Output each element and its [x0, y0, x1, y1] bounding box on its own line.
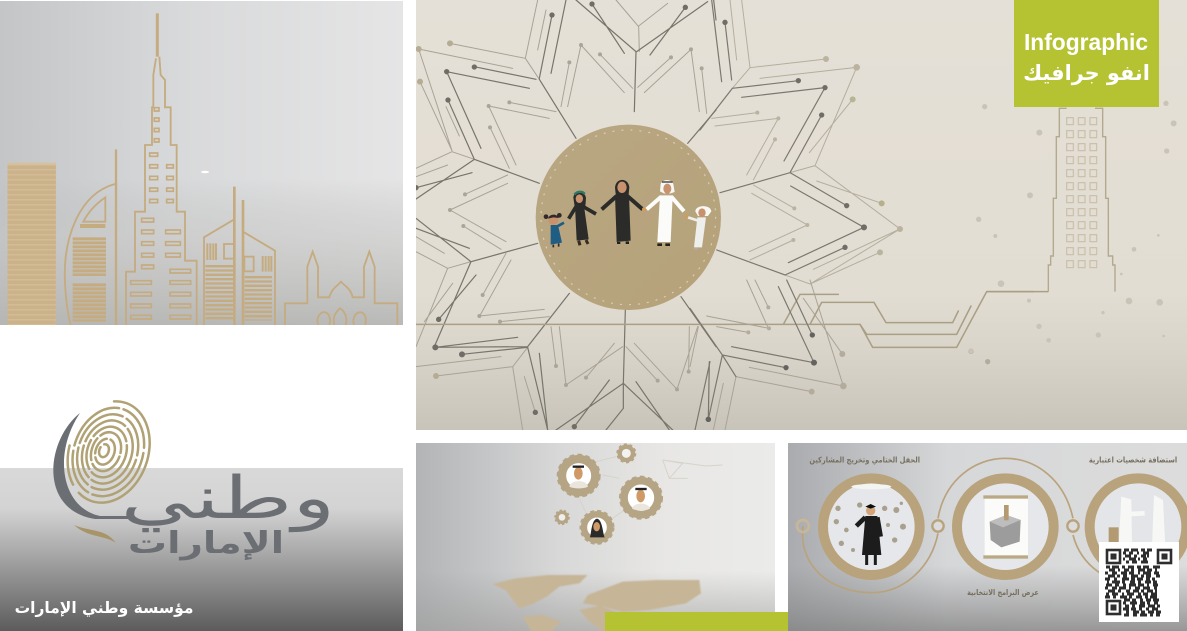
fingerprint	[54, 390, 163, 514]
step captions: الحفل الختامي وتخريج المشاركين	[809, 456, 920, 465]
circuit pattern bottom with traces	[413, 280, 1033, 430]
caption: مؤسسة وطني الإمارات	[15, 599, 193, 618]
twin towers	[204, 187, 275, 325]
step captions	[809, 456, 1177, 598]
logo	[53, 390, 335, 561]
title badge	[1014, 0, 1159, 107]
logo word: وطني	[121, 464, 335, 533]
tower outline at right with scattered dots	[969, 101, 1177, 354]
light glint	[201, 171, 209, 173]
family circle	[536, 125, 721, 310]
sail tower	[65, 149, 116, 325]
panel: main family circuit illustration	[413, 0, 1187, 430]
panel: world map and gears	[416, 443, 775, 631]
panel: logo caption band	[0, 390, 403, 631]
mother in black abaya	[602, 180, 643, 244]
title badge: انفو جرافيك	[1023, 61, 1150, 85]
gear: man	[558, 455, 599, 496]
gears with portraits	[555, 444, 662, 544]
girl in black abaya	[569, 192, 596, 245]
world map	[493, 575, 701, 631]
network lines	[579, 457, 723, 518]
step ring: ballot box	[957, 478, 1054, 575]
step captions: عرض البرامج الانتخابية	[967, 588, 1039, 598]
gear: woman	[581, 511, 613, 544]
mosque	[285, 252, 397, 325]
crescent	[53, 413, 135, 519]
boy in white kandura	[685, 206, 711, 249]
small girl in blue	[544, 213, 564, 247]
panel: programme steps	[788, 443, 1187, 631]
chevron connectors	[932, 520, 944, 532]
skyline buildings	[8, 13, 397, 325]
circuit pattern left and top	[413, 0, 716, 430]
title badge: Infographic	[1024, 29, 1148, 55]
circuit pattern right	[700, 0, 903, 284]
green bar	[605, 612, 788, 631]
small gears	[620, 447, 633, 460]
step ring: handshake	[1090, 478, 1186, 575]
qr code	[1099, 542, 1179, 622]
striped tower	[8, 163, 56, 325]
swoosh	[74, 525, 116, 543]
gear: man right	[620, 477, 662, 518]
step ring: graduation	[823, 478, 920, 575]
father in white kandura	[642, 180, 684, 245]
connecting thin arcs	[802, 458, 1099, 594]
logo sub word: الإمارات	[128, 526, 284, 561]
central spire tower	[126, 13, 197, 325]
panel: skyline	[0, 0, 403, 325]
